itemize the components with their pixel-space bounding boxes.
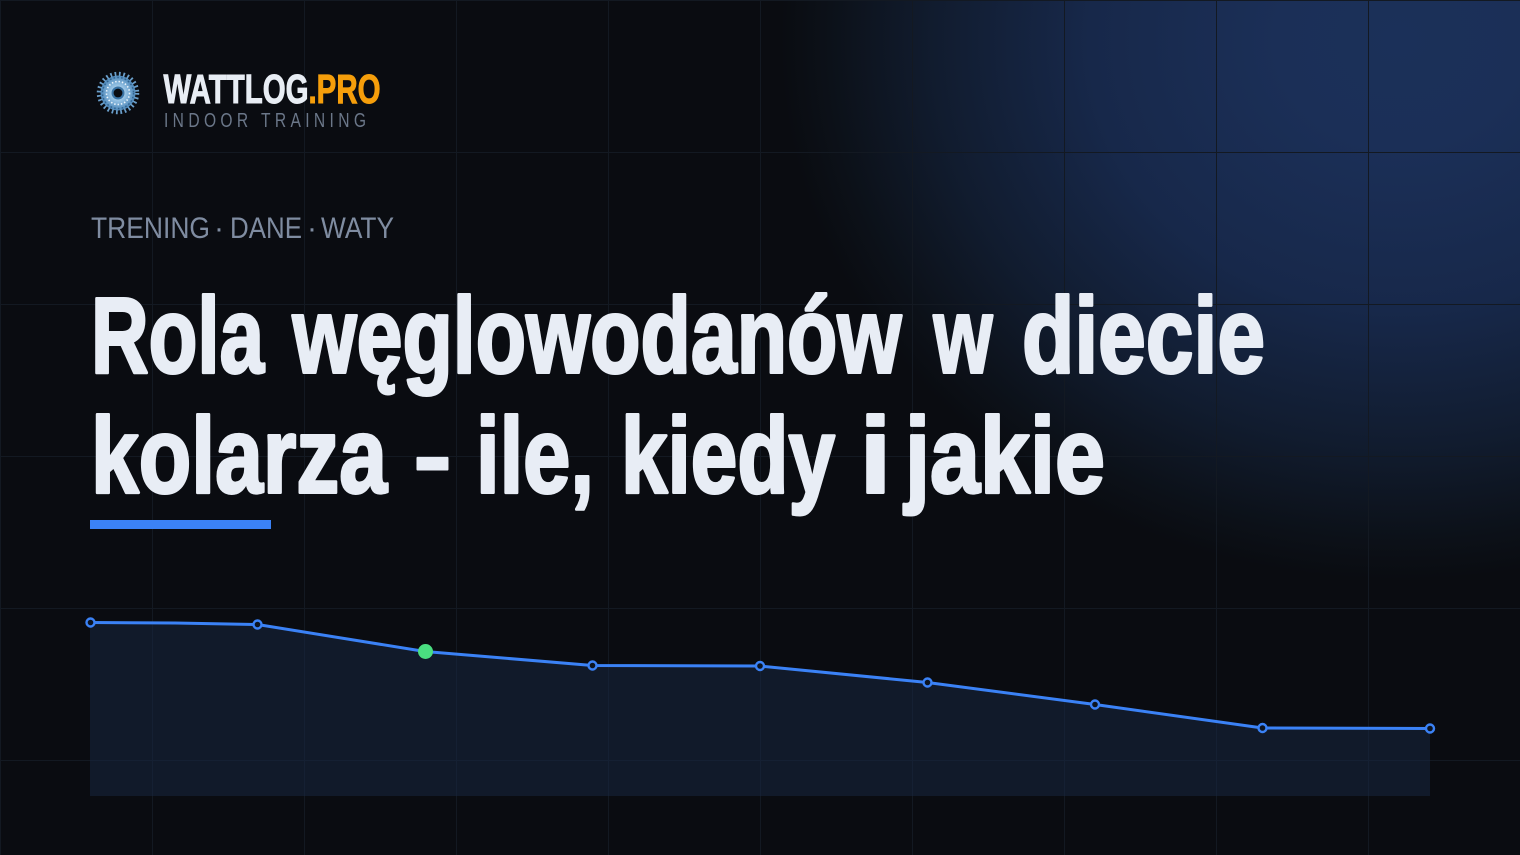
title (91, 274, 1265, 516)
title: – (416, 394, 450, 516)
chart markers (86, 618, 1434, 732)
eyebrow label: TRENING (91, 212, 210, 245)
title accent underline (90, 520, 271, 529)
eyebrow label (91, 212, 394, 245)
title: w (933, 274, 993, 396)
eyebrow label: WATY (321, 212, 394, 245)
title: Rola (91, 274, 265, 396)
title: węglowodanów (292, 274, 902, 396)
eyebrow label: · (307, 212, 317, 245)
highlighted marker (418, 644, 433, 659)
title: i (860, 394, 891, 516)
title: kolarza (91, 394, 388, 516)
title: kiedy (621, 394, 835, 516)
chart line (90, 622, 1430, 728)
tagline: INDOOR TRAINING (164, 109, 366, 131)
brand name: WATTLOG.PRO (164, 66, 380, 112)
chart area fill (90, 622, 1430, 796)
title: jakie (903, 394, 1105, 516)
title: ile, (476, 394, 594, 516)
icon: cassette gear (99, 74, 137, 112)
eyebrow label: DANE (230, 212, 302, 245)
title: diecie (1022, 274, 1265, 396)
line chart (86, 618, 1434, 796)
eyebrow label: · (214, 212, 224, 245)
logo (99, 66, 380, 131)
